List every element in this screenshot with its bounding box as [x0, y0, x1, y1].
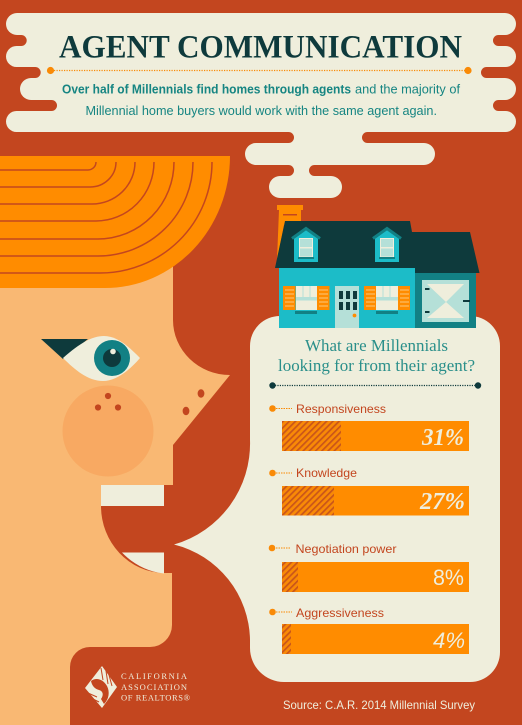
- logo text: OF REALTORS®: [121, 692, 191, 702]
- hair: [0, 156, 230, 288]
- bar: negotiation power: [269, 542, 469, 592]
- right window: [364, 286, 410, 314]
- bar: negotiation power: Negotiation power: [296, 542, 396, 556]
- bar: aggressiveness: Aggressiveness: [296, 606, 384, 620]
- icon: eye: [41, 336, 140, 381]
- freckles: [95, 389, 204, 415]
- icon: house: [275, 205, 480, 328]
- title: AGENT COMMUNICATION: [59, 30, 462, 66]
- bar: knowledge: 27%: [419, 489, 465, 515]
- left dormer: [292, 228, 320, 262]
- bar: responsiveness: 31%: [421, 425, 464, 451]
- intro text: Millennial home buyers would work with the same agent again.: [86, 104, 437, 118]
- bar: aggressiveness: [269, 606, 469, 654]
- cheek: [62, 386, 154, 476]
- bar: negotiation power: 8%: [433, 565, 464, 590]
- bar: knowledge: Knowledge: [296, 466, 357, 480]
- upper teeth: [101, 485, 164, 506]
- roof: [275, 221, 480, 273]
- panel: title cloud: [0, 13, 522, 198]
- chart heading: looking for from their agent?: [278, 356, 475, 375]
- icon: logo mark: [85, 666, 117, 708]
- garage wall: [415, 273, 476, 328]
- chimney: [277, 205, 303, 260]
- bar: responsiveness: Responsiveness: [296, 402, 386, 416]
- intro text: and the majority of: [355, 82, 461, 96]
- chart divider: [269, 382, 481, 389]
- bar: aggressiveness: 4%: [433, 628, 465, 653]
- front door: [335, 286, 359, 328]
- logo: [85, 666, 191, 708]
- left window: [283, 286, 330, 314]
- lower teeth: [122, 552, 164, 574]
- logo text: [121, 671, 191, 702]
- chart heading: What are Millennials: [305, 336, 448, 355]
- logo text: CALIFORNIA: [121, 671, 188, 681]
- title divider: [47, 67, 472, 74]
- face: [0, 260, 230, 725]
- chart heading: [278, 336, 475, 375]
- right dormer: [373, 228, 401, 262]
- logo text: ASSOCIATION: [121, 682, 187, 692]
- bar: responsiveness: [269, 402, 469, 451]
- garage door: [422, 280, 470, 322]
- house wall: [279, 268, 415, 328]
- intro text: [62, 82, 461, 118]
- panel: speech bubble: [174, 316, 500, 682]
- source: Source: C.A.R. 2014 Millennial Survey: [283, 698, 475, 712]
- bar: knowledge: [269, 466, 469, 516]
- intro text: Over half of Millennials find homes through agents: [62, 82, 351, 96]
